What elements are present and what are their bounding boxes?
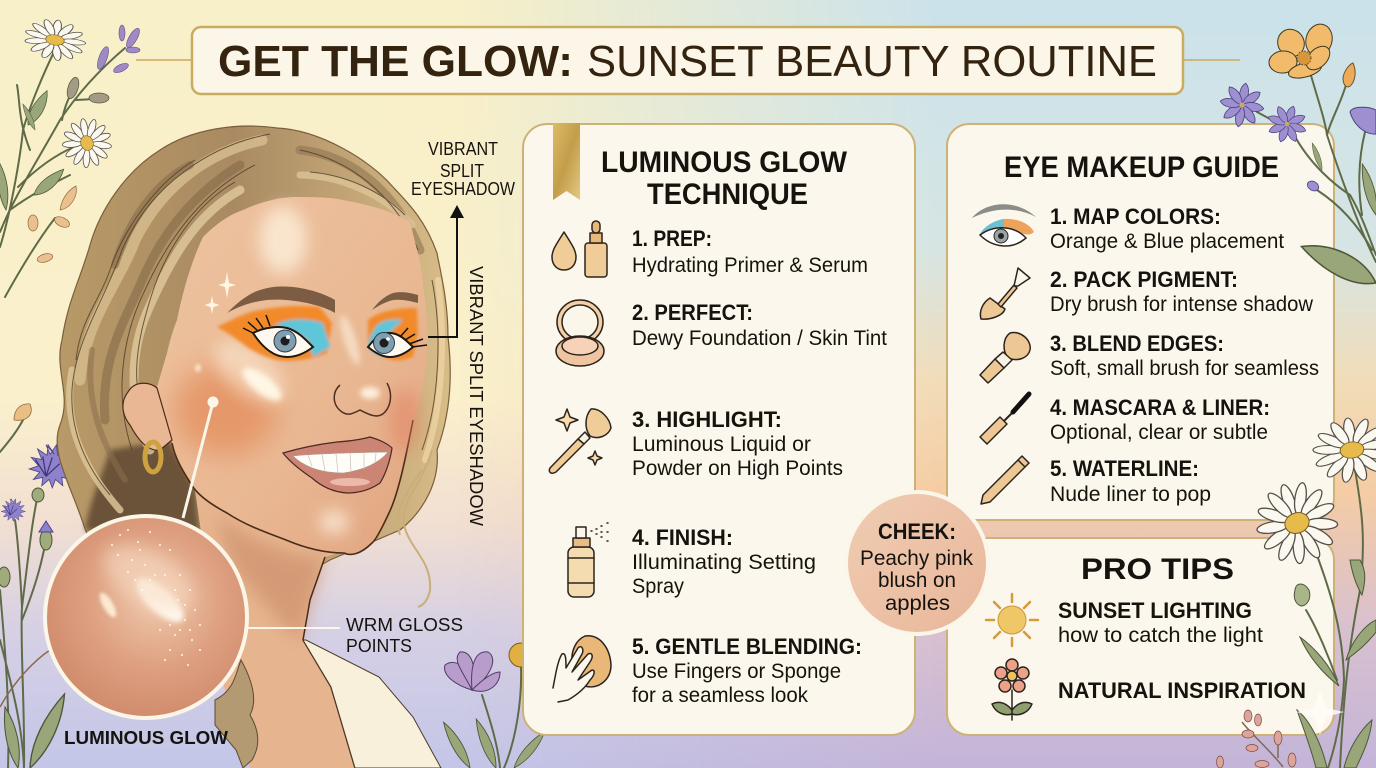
eyeshadow top label: SPLIT [440,161,484,181]
step 3 text: Luminous Liquid or [632,433,811,456]
neck [195,490,372,768]
forehead and cheek highlights [195,206,380,534]
wavy wisp right [398,450,432,607]
eyes [243,315,427,357]
step 5 text: Use Fingers or Sponge [632,660,841,683]
icon: drop and serum bottle [552,221,607,277]
icon: sponge and hand [553,636,611,702]
icon: sun [986,594,1038,646]
icon: pencil [981,456,1029,504]
portrait illustration [45,126,450,768]
cheek blush [173,364,277,456]
hair light strands [70,140,442,510]
decorative sparkle [1296,690,1344,735]
glow detail circle [45,396,340,718]
step 5 text: Nude liner to pop [1050,483,1211,506]
neck outline [303,557,355,768]
step 5 text: 5. WATERLINE: [1050,456,1199,481]
label: luminous glow: LUMINOUS GLOW [64,728,228,748]
step 1 text: Hydrating Primer & Serum [632,254,868,277]
step 2 text: Dry brush for intense shadow [1050,293,1314,316]
callout: cheek: blush on [878,569,956,592]
label: warm gloss points: WRM GLOSS [346,615,463,635]
rotated eyeshadow label: VIBRANT SPLIT EYESHADOW [466,266,486,526]
heading: TECHNIQUE [647,178,808,211]
step 4 text: 4. MASCARA & LINER: [1050,395,1270,420]
step 2 text: Dewy Foundation / Skin Tint [632,327,887,350]
step 2 text [1050,267,1314,316]
tip 1 text: how to catch the light [1058,624,1263,647]
step 1 text [1050,204,1284,253]
callout: cheek: apples [885,592,950,615]
face [157,197,427,554]
floral decoration: left bottom [0,404,75,768]
step 2 text: 2. PACK PIGMENT: [1050,267,1238,292]
heading: LUMINOUS GLOW [601,146,848,179]
earring [145,442,161,472]
shadowed hair beneath ear [85,440,200,540]
step 4 text: Optional, clear or subtle [1050,421,1268,444]
icon: mascara wand [980,394,1029,444]
tip 1 text: SUNSET LIGHTING [1058,598,1252,623]
panel: eye makeup guide [947,124,1334,520]
floral decoration: bottom right [1216,413,1376,768]
callout: cheek: CHEEK: [878,519,956,544]
heading: EYE MAKEUP GUIDE [1004,151,1279,184]
icon: flower [992,659,1032,720]
step 2 text: 2. PERFECT: [632,300,753,325]
eyeshadow top label: EYESHADOW [411,179,515,199]
step 3 text: 3. BLEND EDGES: [1050,331,1224,356]
arrow: eye to eyeshadow label [428,205,464,337]
ribbon [553,123,580,200]
icon: setting spray [568,523,608,597]
step 4 text: 4. FINISH: [632,525,733,550]
icon: eye with split shadow [972,204,1036,246]
step 1 text: 1. MAP COLORS: [1050,204,1221,229]
eyeshadow top label [411,139,515,199]
hair back [57,126,450,600]
step 3 text: 3. HIGHLIGHT: [632,407,782,432]
dress [303,640,441,768]
panel: pro tips [947,538,1334,735]
title banner [136,27,1240,94]
step 5 text: 5. GENTLE BLENDING: [632,634,862,659]
icon: highlight brush and sparkles [549,409,611,473]
eyeshadow [217,306,418,361]
jaw outline [172,420,413,554]
tip 2 text: NATURAL INSPIRATION [1058,678,1306,703]
step 3 text [1050,331,1319,380]
step 1 text: Orange & Blue placement [1050,230,1284,253]
nose [334,383,391,416]
step 3 text [632,407,843,480]
callout: cheek: Peachy pink [860,547,973,570]
step 4 text [1050,395,1270,444]
floral decoration: bottom centre [440,643,548,768]
heading [601,146,848,211]
step 1 text: 1. PREP: [632,226,712,251]
icon: powder compact [556,300,604,366]
step 5 text [1050,456,1211,506]
braid [215,660,258,768]
floral decoration: top right [1216,21,1376,301]
step 3 text: Soft, small brush for seamless [1050,357,1319,380]
step 1 text [632,226,868,277]
step 4 text: Illuminating Setting [632,551,816,574]
heading: PRO TIPS [1081,553,1234,586]
icon: fluffy brush [980,332,1030,383]
title banner: GET THE GLOW: [218,37,573,86]
step 5 text: for a seamless look [632,684,808,707]
step 3 text: Powder on High Points [632,457,843,480]
jaw shadow on neck [215,515,325,640]
lips and smile [283,437,392,493]
tip 1 text [1058,598,1263,647]
step 4 text [632,525,816,598]
eyebrows [227,286,335,313]
icon: shovel applicator [980,268,1030,319]
label: warm gloss points: POINTS [346,636,412,656]
panel: luminous glow technique [523,123,915,735]
title banner: SUNSET BEAUTY ROUTINE [587,37,1157,86]
floral decoration: top left [0,15,142,297]
step 4 text: Spray [632,575,684,598]
eyeshadow top label: VIBRANT [428,139,498,159]
label: warm gloss points [346,615,463,656]
ear [123,383,172,450]
step 5 text [632,634,862,707]
callout: cheek [846,492,988,634]
step 2 text [632,300,887,350]
hair line work [72,134,438,495]
